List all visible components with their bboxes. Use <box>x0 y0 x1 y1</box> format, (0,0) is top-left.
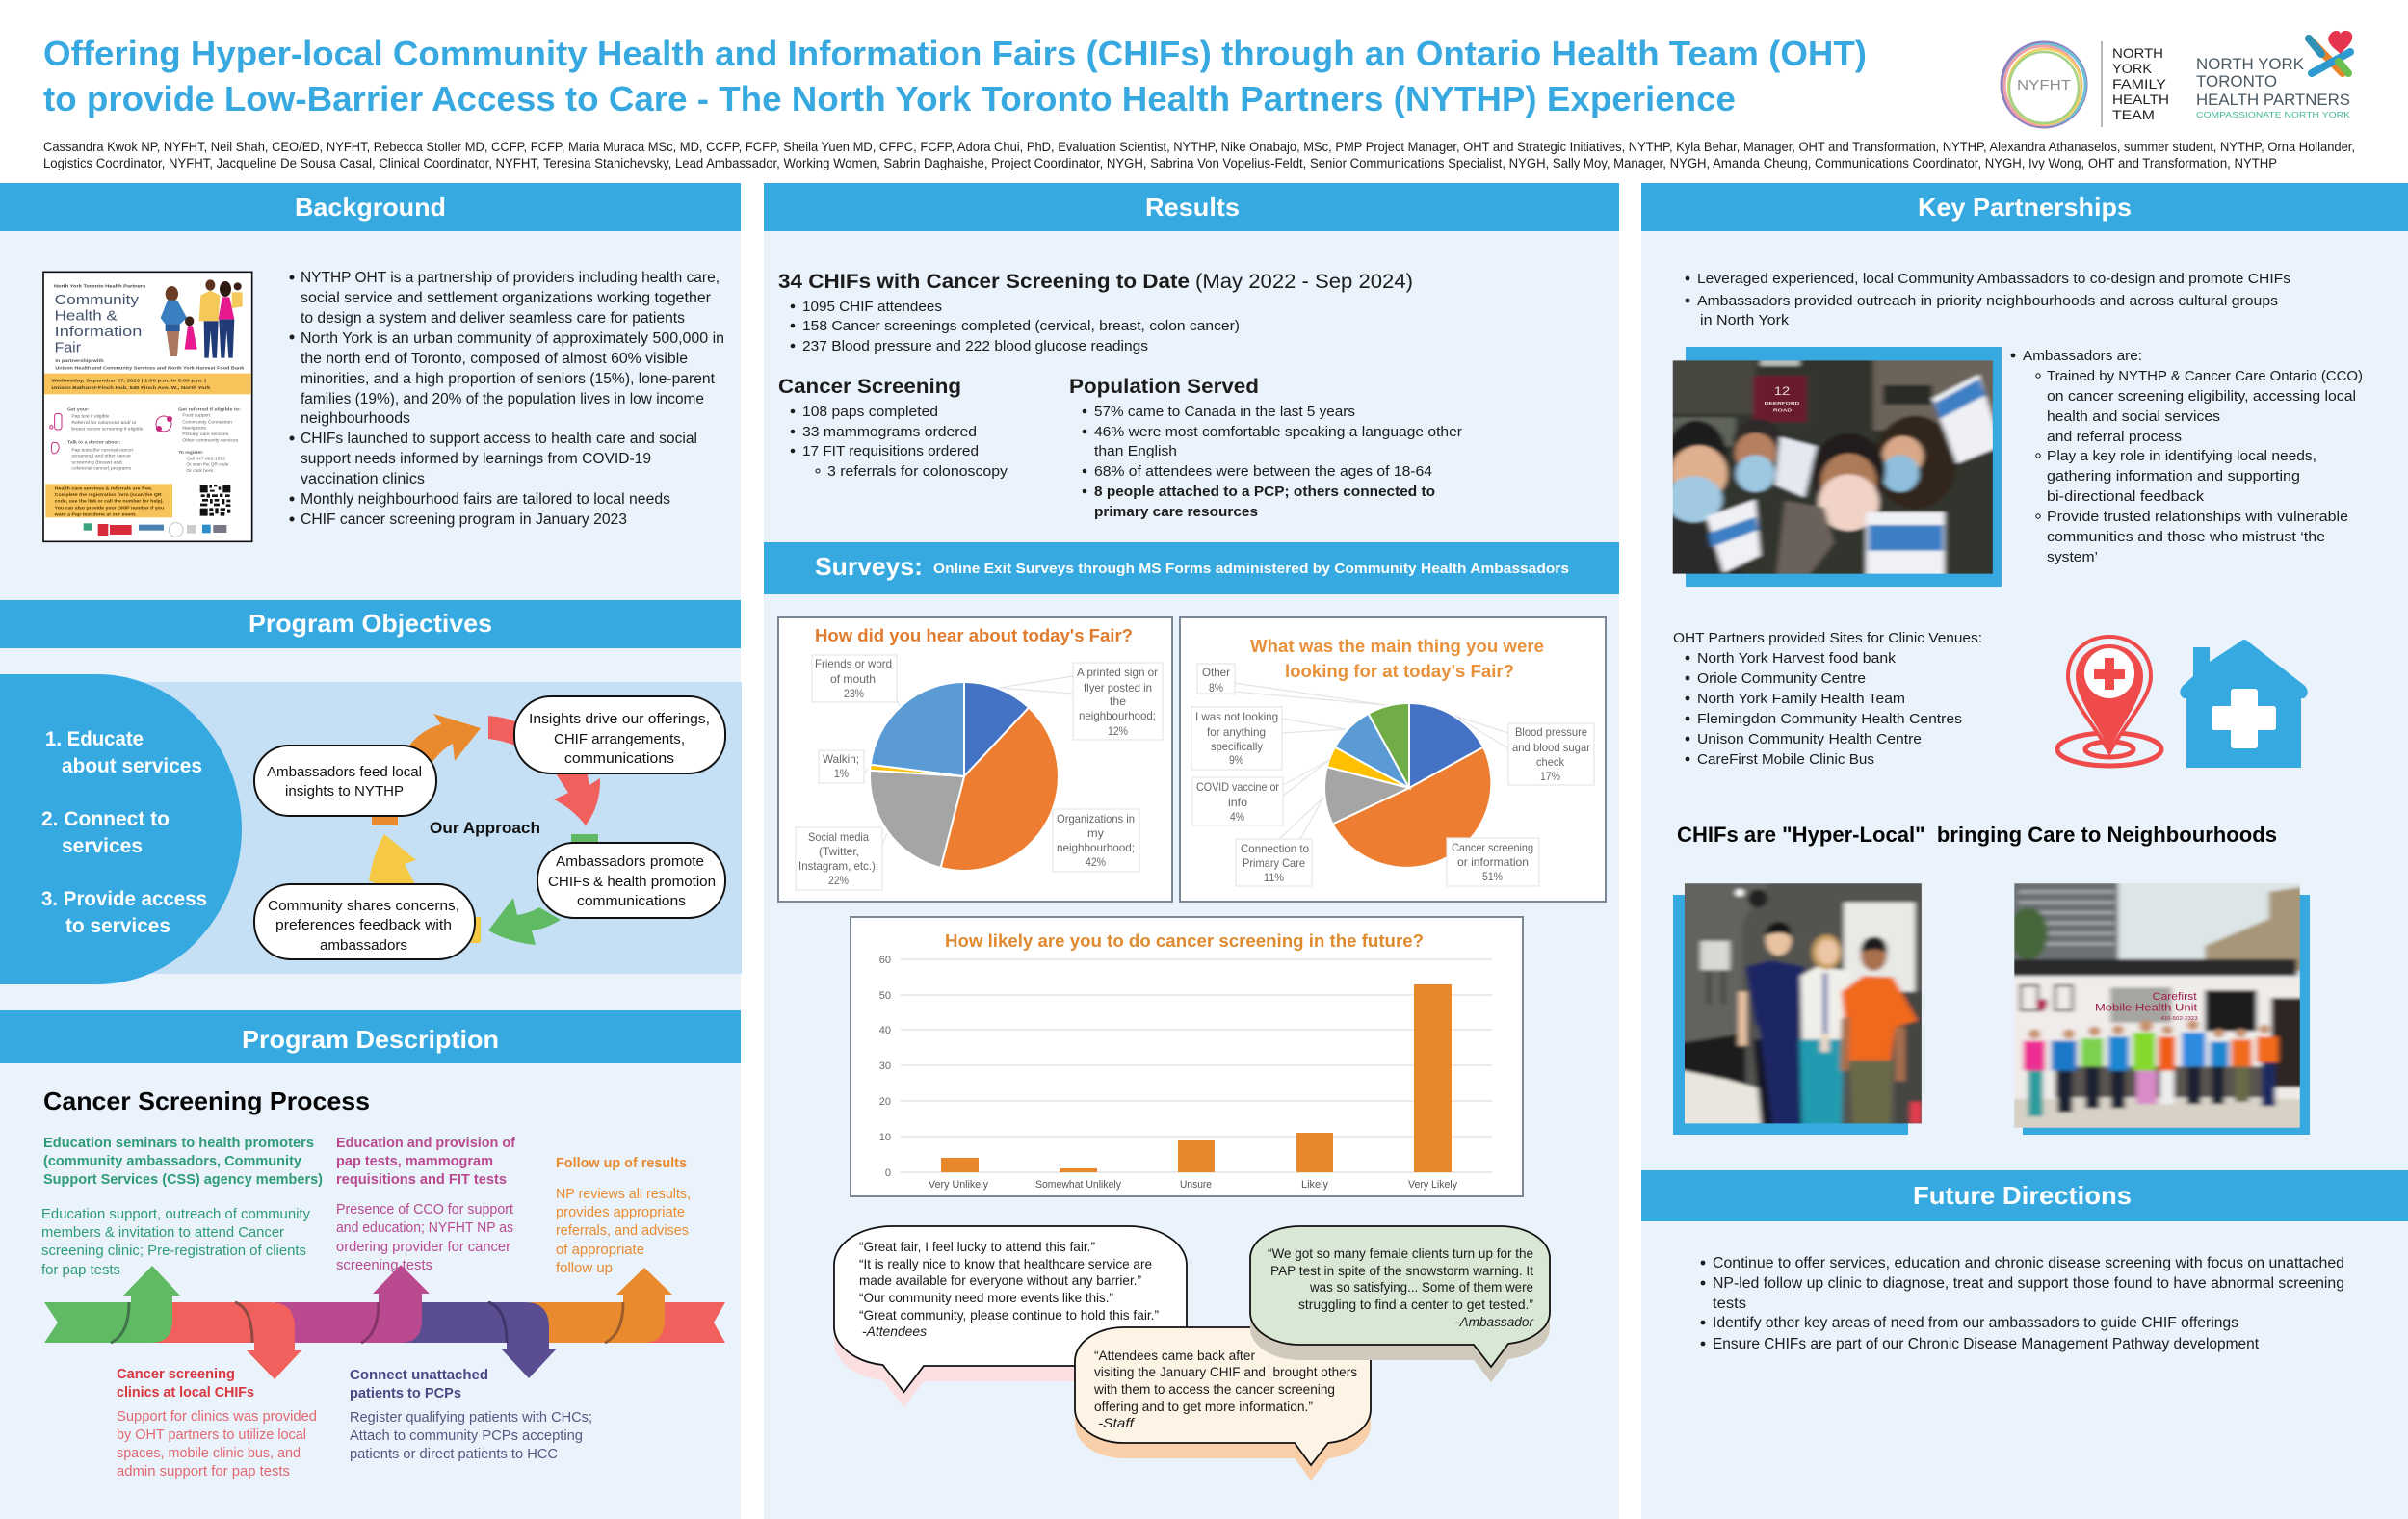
ambassadors are list: Provide trusted relationships with vulnerable <box>2047 509 2348 525</box>
bar chart: likelihood of future cancer screening: Unsure <box>1180 1179 1212 1191</box>
approach step: community shares concerns: preferences feedback with <box>275 917 452 933</box>
pie chart: how did you hear: Organizations in <box>1057 812 1135 825</box>
results: population served: than English <box>1094 444 1177 459</box>
background bullet list: support needs informed by learnings from COVID-19 <box>301 451 651 467</box>
panel: background <box>0 183 741 541</box>
poster: community health and information fair: Health care services & referrals are free. <box>55 485 152 490</box>
pie chart: main thing looking for: Blood pressure <box>1515 725 1587 739</box>
background bullet list: CHIFs launched to support access to health care and social <box>301 431 697 447</box>
step text: education seminars: Education support, outreach of community <box>41 1207 311 1222</box>
bar chart: likelihood of future cancer screening: 20 <box>879 1096 891 1108</box>
subheading: hyper-local: CHIFs are "Hyper-Local" bringing Care to Neighbourhoods <box>1677 823 2277 847</box>
pie chart: main thing looking for: 51% <box>1482 870 1503 883</box>
step text: connect unattached <box>350 1368 592 1462</box>
bar chart: likelihood of future cancer screening: 50 <box>879 990 891 1002</box>
approach step: community shares concerns <box>254 884 475 959</box>
quote: ambassador: was so satisfying... Some of them were <box>1309 1279 1533 1295</box>
photo: ambassadors with flyers: ROAD <box>1773 408 1792 413</box>
step text: education and provision: pap tests, mammogram <box>336 1154 493 1169</box>
pie chart: main thing looking for: Cancer screening <box>1452 841 1533 854</box>
step text: follow up: referrals, and advises <box>556 1223 689 1239</box>
approach step: insights drive offerings <box>514 696 725 773</box>
label: our approach: Our Approach <box>430 819 540 837</box>
logo: NYFHT: NYFHT <box>2017 77 2071 93</box>
future directions list: Ensure CHIFs are part of our Chronic Disease Management Pathway development <box>1713 1336 2260 1352</box>
heading: key partnerships: Key Partnerships <box>1918 193 2132 222</box>
background bullet list: neighbourhoods <box>301 410 410 427</box>
ambassadors are list: communities and those who mistrust ‘the <box>2047 529 2325 545</box>
title: Offering Hyper-local Community Health and Information Fairs (CHIFs) through an Ontario Health Team (OHT) <box>43 34 1867 73</box>
photo: carefirst mobile health unit team: Carefirst <box>2153 990 2197 1003</box>
step text: follow up: NP reviews all results, <box>556 1187 691 1202</box>
approach step: ambassadors promote: Ambassadors promote <box>556 853 704 870</box>
quote: ambassador <box>1250 1226 1550 1382</box>
objectives list <box>0 674 242 984</box>
poster partner logos <box>84 523 226 537</box>
results: population served <box>1069 376 1462 520</box>
bar chart: likelihood of future cancer screening: 30 <box>879 1061 891 1072</box>
quote: ambassador: PAP test in spite of the snowstorm warning. It <box>1270 1263 1533 1278</box>
step text: education and provision: Presence of CCO for support <box>336 1202 513 1218</box>
pie chart: how did you hear: my <box>1087 826 1104 840</box>
partnerships intro bullets <box>1686 271 2290 328</box>
pie chart: main thing looking for: or information <box>1457 855 1529 869</box>
poster: community health and information fair: Other community services <box>182 437 238 442</box>
bar chart: likelihood of future cancer screening: 40 <box>879 1025 891 1036</box>
title <box>43 34 1867 118</box>
ambassadors are list: and referral process <box>2047 429 2182 445</box>
pie chart: how did you hear: Friends or word <box>815 657 892 670</box>
poster: community health and information fair: Information <box>55 325 142 340</box>
ambassadors are list <box>2011 348 2363 565</box>
pie chart: main thing looking for: for anything <box>1207 725 1266 739</box>
approach step: community shares concerns: Community shares concerns, <box>268 898 459 914</box>
pie chart: how did you hear: 1% <box>834 767 849 780</box>
results: cancer screening: 33 mammograms ordered <box>802 425 977 440</box>
photo: carefirst mobile health unit team: 416-502-2323 <box>2160 1015 2198 1022</box>
title: to provide Low-Barrier Access to Care - The North York Toronto Health Partners (NYTHP) Experience <box>43 79 1736 118</box>
ambassadors are list: Ambassadors are: <box>2023 348 2142 364</box>
poster: community health and information fair: Get referred if eligible to: <box>178 406 241 411</box>
quote: attendees: “Great fair, I feel lucky to attend this fair.” <box>859 1239 1095 1254</box>
poster: community health and information fair: breast cancer screening if eligible <box>71 427 144 432</box>
poster: community health and information fair: Unison Health and Community Services and North York Harvest Food Bank <box>55 365 245 370</box>
results: population served: 68% of attendees were between the ages of 18-64 <box>1094 464 1432 480</box>
panel: program objectives <box>0 600 742 984</box>
partnerships intro bullets: in North York <box>1700 312 1790 328</box>
results: cancer screening <box>778 376 1008 480</box>
step text: education and provision: ordering provider for cancer <box>336 1240 510 1255</box>
pie chart: main thing looking for: COVID vaccine or <box>1196 780 1279 794</box>
bar chart: likelihood of future cancer screening: How likely are you to do cancer screening in the future? <box>945 931 1424 951</box>
poster: community health and information fair: Primary care services <box>182 432 228 436</box>
background bullet list: families (19%), and 20% of the population lives in low income <box>301 391 704 407</box>
authors: Cassandra Kwok NP, NYFHT, Neil Shah, CEO/ED, NYFHT, Rebecca Stoller MD, CCFP, FCFP, Maria Muraca MSc, MD, CCFP, FCFP, Sheila Yuen MD, CFPC, FCFP, Adora Chui, PhD, Evaluation Scientist, NYTHP, Nike Onabajo, MSc, PMP Project Manager, OHT and Strategic Initiatives, NYTHP, Kyla Behar, Manager, OHT and Transformation, NYTHP, Alexandra Athanaselos, summer student, NYTHP, Orna Hollander, <box>43 140 2355 154</box>
logo: NYFHT: NORTH <box>2112 45 2163 61</box>
step text: cancer screening clinics: Support for clinics was provided <box>117 1409 317 1425</box>
logo: North York Toronto Health Partners: NORTH YORK <box>2196 55 2305 73</box>
quote: ambassador: struggling to find a center to get tested.” <box>1298 1296 1533 1312</box>
logo: North York Toronto Health Partners: HEALTH PARTNERS <box>2196 91 2350 109</box>
approach step: ambassadors promote: communications <box>577 893 686 909</box>
quote: attendees: “It is really nice to know that healthcare service are <box>859 1256 1152 1271</box>
arrow: yellow <box>369 834 481 943</box>
poster: community health and information fair: Fair <box>55 341 81 356</box>
ambassadors are list: on cancer screening eligibility, accessing local <box>2047 388 2356 405</box>
approach step: ambassadors feed insights: Ambassadors feed local <box>267 764 422 780</box>
logo: NYFHT <box>2002 41 2169 127</box>
results: population served: 57% came to Canada in the last 5 years <box>1094 405 1355 420</box>
ambassadors are list: Trained by NYTHP & Cancer Care Ontario (CCO) <box>2047 368 2363 384</box>
poster: community health and information fair: Call 647-862-1552 <box>186 456 226 460</box>
background bullet list: to design a system and deliver seamless care for patients <box>301 310 685 327</box>
step text: follow up: provides appropriate <box>556 1205 685 1220</box>
clinic venue list: OHT Partners provided Sites for Clinic Venues: <box>1673 630 1982 646</box>
approach step: ambassadors promote <box>537 843 725 918</box>
approach step: insights drive offerings: communications <box>564 750 674 767</box>
step text: follow up <box>556 1156 691 1276</box>
authors <box>43 140 2355 170</box>
background bullet list: CHIF cancer screening program in January 2023 <box>301 511 627 528</box>
bar chart: likelihood of future cancer screening: Very Likely <box>1408 1179 1457 1191</box>
pie chart: how did you hear: Walkin; <box>823 752 859 766</box>
heading: program description: Program Description <box>242 1025 499 1054</box>
logo: NYFHT: YORK <box>2112 61 2153 76</box>
pie chart: how did you hear: the <box>1110 694 1126 708</box>
bar chart: likelihood of future cancer screening: Likely <box>1301 1179 1328 1191</box>
pie chart: main thing looking for: looking for at today's Fair? <box>1285 662 1514 681</box>
approach step: ambassadors feed insights <box>254 746 436 816</box>
pie chart: main thing looking for: Other <box>1202 666 1230 679</box>
results: population served: Population Served <box>1069 376 1259 398</box>
logo: North York Toronto Health Partners <box>2196 31 2352 119</box>
logo: NYFHT: TEAM <box>2112 107 2155 122</box>
pie chart: main thing looking for: 11% <box>1264 871 1284 884</box>
step text: connect unattached: patients to PCPs <box>350 1386 461 1401</box>
approach step: community shares concerns: ambassadors <box>320 937 407 954</box>
background bullet list: social service and settlement organizations working together <box>301 290 711 306</box>
objectives list: 2. Connect to <box>41 808 170 830</box>
pie chart: how did you hear: 23% <box>844 687 864 700</box>
quote: attendees: -Attendees <box>862 1323 927 1339</box>
background bullet list: North York is an urban community of approximately 500,000 in <box>301 330 724 347</box>
photo: clinicians in mobile clinic <box>1673 883 1922 1135</box>
results summary: 34 CHIFs with Cancer Screening to Date <box>778 271 1190 293</box>
quote: ambassador: “We got so many female clients turn up for the <box>1268 1245 1533 1261</box>
quote: staff: “Attendees came back after <box>1094 1348 1255 1363</box>
pie chart: how did you hear: Social media <box>808 830 869 844</box>
bar chart: likelihood of future cancer screening: 0 <box>885 1167 891 1179</box>
poster: community health and information fair: Pap test if eligible <box>71 414 110 419</box>
results summary: 1095 CHIF attendees <box>802 300 942 315</box>
ambassadors are list: bi-directional feedback <box>2047 488 2205 505</box>
step text: cancer screening clinics: Cancer screening <box>117 1367 235 1382</box>
results summary <box>778 271 1413 354</box>
poster: community health and information fair: Navigators <box>182 426 206 431</box>
icon: location pin <box>2057 637 2161 766</box>
poster: community health and information fair: Community Connection <box>182 419 233 424</box>
ambassadors are list: Play a key role in identifying local needs, <box>2047 448 2316 464</box>
bar chart: likelihood of future cancer screening: 60 <box>879 955 891 966</box>
poster: community health and information fair: Health & <box>55 309 118 325</box>
step text: connect unattached: Connect unattached <box>350 1368 488 1383</box>
panel: program description <box>0 1010 741 1480</box>
ambassadors are list: gathering information and supporting <box>2047 468 2300 485</box>
step text: education seminars: (community ambassadors, Community <box>43 1154 301 1169</box>
approach step: ambassadors promote: CHIFs & health promotion <box>548 874 716 890</box>
results: population served: primary care resources <box>1094 505 1258 520</box>
results: cancer screening: 17 FIT requisitions ordered <box>802 444 979 459</box>
poster: community health and information fair: Or click here. <box>186 468 215 473</box>
panel: future directions <box>1641 1170 2408 1352</box>
arrow: red <box>488 716 600 825</box>
pie chart: main thing looking for: and blood sugar <box>1512 741 1590 754</box>
results: population served: 8 people attached to a PCP; others connected to <box>1094 485 1435 500</box>
poster: community health and information fair: screening) and other cancer <box>71 454 132 458</box>
step text: education seminars: Education seminars to health promoters <box>43 1136 314 1151</box>
step text: connect unattached: patients or direct patients to HCC <box>350 1447 558 1462</box>
poster: community health and information fair: Get your: <box>67 406 90 411</box>
background bullet list: minorities, and a high proportion of seniors (15%), lone-parent <box>301 371 716 387</box>
quote: attendees: “Our community need more events like this.” <box>859 1290 1113 1305</box>
poster: community health and information fair: In partnership with <box>55 358 104 363</box>
logo: NYFHT: FAMILY <box>2112 76 2167 92</box>
pie chart: main thing looking for: I was not looking <box>1195 710 1278 723</box>
pie chart: how did you hear: 12% <box>1108 724 1128 738</box>
poster: community health and information fair: You can also provide your OHIP number if you <box>55 506 164 511</box>
step text: connect unattached: Register qualifying patients with CHCs; <box>350 1410 592 1426</box>
poster: community health and information fair: Complete the registration form (scan the QR <box>55 492 163 497</box>
banner: surveys: Surveys: <box>815 552 923 581</box>
quote: attendees <box>834 1226 1187 1407</box>
heading: background: Background <box>295 193 446 222</box>
objectives list: 3. Provide access <box>41 888 207 910</box>
step text: education and provision: requisitions and FIT tests <box>336 1172 507 1188</box>
pie chart: how did you hear: neighbourhood; <box>1057 841 1135 854</box>
clinic venue list: Oriole Community Centre <box>1697 670 1866 687</box>
logo: North York Toronto Health Partners: COMPASSIONATE NORTH YORK <box>2196 110 2350 119</box>
results: cancer screening: 108 paps completed <box>802 405 938 420</box>
pie chart: main thing looking for: info <box>1228 796 1247 809</box>
pie chart: how did you hear <box>778 617 1172 902</box>
clinic venue list <box>1673 630 1982 768</box>
poster: community health and information fair: want a Pap test done at our event. <box>53 511 137 516</box>
photo: carefirst mobile health unit team: Mobile Health Unit <box>2095 1001 2198 1013</box>
panel: key partnerships <box>1641 183 2408 1519</box>
bar chart: likelihood of future cancer screening: Very Unlikely <box>929 1179 988 1191</box>
pie chart: main thing looking for: check <box>1536 755 1565 769</box>
future directions list: tests <box>1713 1296 1746 1312</box>
step text: cancer screening clinics: admin support for pap tests <box>117 1464 290 1480</box>
photo: ambassadors with flyers <box>1652 347 2016 588</box>
objectives list: services <box>62 835 143 857</box>
poster: community health and information fair: Unison Bathurst-Finch Hub, 540 Finch Ave. W., North York <box>51 385 211 391</box>
banner: surveys: Online Exit Surveys through MS Forms administered by Community Health Ambassadors <box>933 562 1569 577</box>
quote: staff: offering and to get more information.” <box>1094 1399 1313 1414</box>
poster: community health and information fair: colorectal cancer) programs <box>71 466 131 471</box>
future directions list: NP-led follow up clinic to diagnose, treat and support those found to have abnormal screening <box>1713 1275 2344 1292</box>
pie chart: how did you hear: (Twitter, <box>819 845 859 858</box>
poster: community health and information fair <box>43 272 252 541</box>
arrow: orange <box>372 714 481 825</box>
objectives list: to services <box>65 915 170 937</box>
banner: surveys <box>764 542 1619 594</box>
panel: left column <box>0 183 742 1519</box>
clinic venue list: CareFirst Mobile Clinic Bus <box>1697 751 1874 768</box>
results: population served: 46% were most comfortable speaking a language other <box>1094 425 1462 440</box>
bar chart: likelihood of future cancer screening: Somewhat Unlikely <box>1035 1179 1121 1191</box>
heading: program objectives: Program Objectives <box>249 609 492 638</box>
quote: staff <box>1075 1327 1371 1480</box>
poster: community health and information fair: Pap tests (for cervical cancer <box>71 447 134 452</box>
logo: NYFHT: HEALTH <box>2112 92 2169 107</box>
background bullet list: Monthly neighbourhood fairs are tailored to local needs <box>301 491 670 508</box>
step text: follow up: of appropriate <box>556 1243 644 1258</box>
poster: community health and information fair: Food support <box>182 413 211 418</box>
pie chart: main thing looking for: 9% <box>1229 753 1243 767</box>
quote: attendees: “Great community, please continue to hold this fair.” <box>859 1307 1159 1323</box>
results summary: 237 Blood pressure and 222 blood glucose readings <box>802 339 1148 354</box>
heading: future directions: Future Directions <box>1913 1181 2132 1210</box>
pie chart: how did you hear: How did you hear about today's Fair? <box>815 626 1133 645</box>
clinic venue list: North York Family Health Team <box>1697 691 1905 707</box>
approach step: insights drive offerings: CHIF arrangements, <box>554 731 685 747</box>
poster: community health and information fair: Referral for colorectal and/ or <box>71 420 137 425</box>
photo: ambassadors with flyers: DEERFORD <box>1765 402 1799 406</box>
poster: community health and information fair: Wednesday, September 27, 2023 | 1:00 p.m. to 5:00 p.m. | <box>51 379 207 384</box>
pie chart: main thing looking for: 17% <box>1540 770 1560 783</box>
background bullet list: the north end of Toronto, composed of almost 60% visible <box>301 351 688 367</box>
quote: staff: visiting the January CHIF and brought others <box>1094 1364 1357 1379</box>
bar chart: likelihood of future cancer screening <box>851 917 1523 1196</box>
process ribbon <box>44 1265 725 1379</box>
arrow: green <box>488 834 598 945</box>
results: cancer screening: 3 referrals for colonoscopy <box>827 464 1008 480</box>
quote: ambassador: -Ambassador <box>1455 1314 1534 1329</box>
pie chart: how did you hear: flyer posted in <box>1084 681 1152 694</box>
step text: cancer screening clinics: clinics at local CHIFs <box>117 1385 254 1401</box>
pie chart: main thing looking for <box>1180 617 1606 902</box>
step text: education and provision <box>336 1136 515 1273</box>
poster: community health and information fair: Talk to a doctor about: <box>67 440 120 445</box>
objectives list: 1. Educate <box>45 728 144 750</box>
partnerships intro bullets: Ambassadors provided outreach in priority neighbourhoods and across cultural groups <box>1697 293 2278 309</box>
pie chart: how did you hear: A printed sign or <box>1077 666 1158 679</box>
quote: staff: -Staff <box>1098 1415 1136 1430</box>
poster qr code <box>200 485 230 516</box>
poster: community health and information fair: North York Toronto Health Partners <box>54 283 146 288</box>
ambassadors are list: health and social services <box>2047 408 2220 425</box>
objectives list: about services <box>62 755 202 777</box>
step text: education seminars <box>41 1136 323 1278</box>
pie chart: main thing looking for: What was the main thing you were <box>1250 637 1544 656</box>
pie chart: main thing looking for: Primary Care <box>1243 856 1305 870</box>
pie chart: how did you hear: of mouth <box>830 672 876 686</box>
poster: community health and information fair: code, use the link or call the number for help). <box>55 499 164 504</box>
step text: connect unattached: Attach to community PCPs accepting <box>350 1428 583 1444</box>
subheading: cancer screening process: Cancer Screening Process <box>43 1087 370 1115</box>
step text: cancer screening clinics <box>117 1367 317 1480</box>
approach step: ambassadors feed insights: insights to NYTHP <box>285 783 404 799</box>
icon: house with cross <box>2180 640 2308 768</box>
step text: cancer screening clinics: spaces, mobile clinic bus, and <box>117 1446 301 1461</box>
quote: attendees: made available for everyone without any barrier.” <box>859 1272 1141 1288</box>
background bullet list: NYTHP OHT is a partnership of providers including health care, <box>301 270 720 286</box>
authors: Logistics Coordinator, NYFHT, Jacqueline De Sousa Casal, Clinical Coordinator, NYFHT, Teresina Stanichevsky, Lead Ambassador, Working Women, Sabrin Daghaishe, Project Coordinator, NYGH, Sabrina Von Vopelius-Feldt, Senior Communications Specialist, NYGH, Sally Moy, Manager, NYGH, Amanda Cheung, Communications Coordinator, NYGH, Ivy Wong, OHT and Transformation, NYTHP <box>43 156 2277 170</box>
poster: community health and information fair: screening (breast and <box>71 459 123 464</box>
step text: education and provision: and education; NYFHT NP as <box>336 1220 513 1236</box>
poster: community health and information fair: To register: <box>178 450 204 455</box>
background bullet list <box>289 270 724 528</box>
results: cancer screening: Cancer Screening <box>778 376 961 398</box>
photo: carefirst mobile health unit team <box>2014 883 2310 1135</box>
pie chart: main thing looking for: 4% <box>1230 810 1244 824</box>
logo: North York Toronto Health Partners: TORONTO <box>2196 72 2277 91</box>
results summary: 158 Cancer screenings completed (cervical, breast, colon cancer) <box>802 319 1240 334</box>
clinic venue list: Unison Community Health Centre <box>1697 731 1922 747</box>
results summary: (May 2022 - Sep 2024) <box>1195 271 1413 293</box>
step text: education and provision: Education and provision of <box>336 1136 515 1151</box>
quote: staff: with them to access the cancer screening <box>1093 1381 1335 1397</box>
clinic venue list: Flemingdon Community Health Centres <box>1697 711 1962 727</box>
pie chart: main thing looking for: Connection to <box>1241 842 1309 855</box>
future directions list: Identify other key areas of need from our ambassadors to guide CHIF offerings <box>1713 1315 2238 1331</box>
partnerships intro bullets: Leveraged experienced, local Community Ambassadors to co-design and promote CHIFs <box>1697 271 2290 287</box>
future directions list <box>1701 1255 2344 1352</box>
pie chart: how did you hear: Instagram, etc.); <box>798 859 878 873</box>
step text: education seminars: screening clinic; Pre-registration of clients <box>41 1244 306 1259</box>
background bullet list: vaccination clinics <box>301 471 425 487</box>
pie chart: how did you hear: 22% <box>828 874 849 887</box>
pie chart: main thing looking for: specifically <box>1211 740 1263 753</box>
clinic venue list: North York Harvest food bank <box>1697 650 1897 667</box>
pie chart: how did you hear: 42% <box>1086 855 1106 869</box>
bar chart: likelihood of future cancer screening: 10 <box>879 1132 891 1143</box>
photo: ambassadors with flyers: 12 <box>1774 385 1790 398</box>
step text: cancer screening clinics: by OHT partners to utilize local <box>117 1427 306 1443</box>
step text: follow up: follow up <box>556 1261 613 1276</box>
poster: community health and information fair: Or scan the QR code <box>186 462 229 467</box>
step text: education seminars: for pap tests <box>41 1263 120 1278</box>
heading: results: Results <box>1145 193 1240 222</box>
approach step: insights drive offerings: Insights drive our offerings, <box>529 711 710 727</box>
step text: education seminars: Support Services (CSS) agency members) <box>43 1172 323 1188</box>
step text: follow up: Follow up of results <box>556 1156 687 1171</box>
future directions list: Continue to offer services, education and chronic disease screening with focus on unattached <box>1713 1255 2344 1271</box>
poster: community health and information fair: Community <box>55 293 140 308</box>
pie chart: how did you hear: neighbourhood; <box>1079 709 1156 722</box>
step text: education seminars: members & invitation to attend Cancer <box>41 1225 284 1241</box>
panel: results <box>764 183 1619 1519</box>
pie chart: main thing looking for: 8% <box>1209 681 1223 694</box>
poster illustration: family <box>161 279 243 358</box>
ambassadors are list: system’ <box>2047 549 2098 565</box>
step text: education and provision: screening tests <box>336 1258 432 1273</box>
